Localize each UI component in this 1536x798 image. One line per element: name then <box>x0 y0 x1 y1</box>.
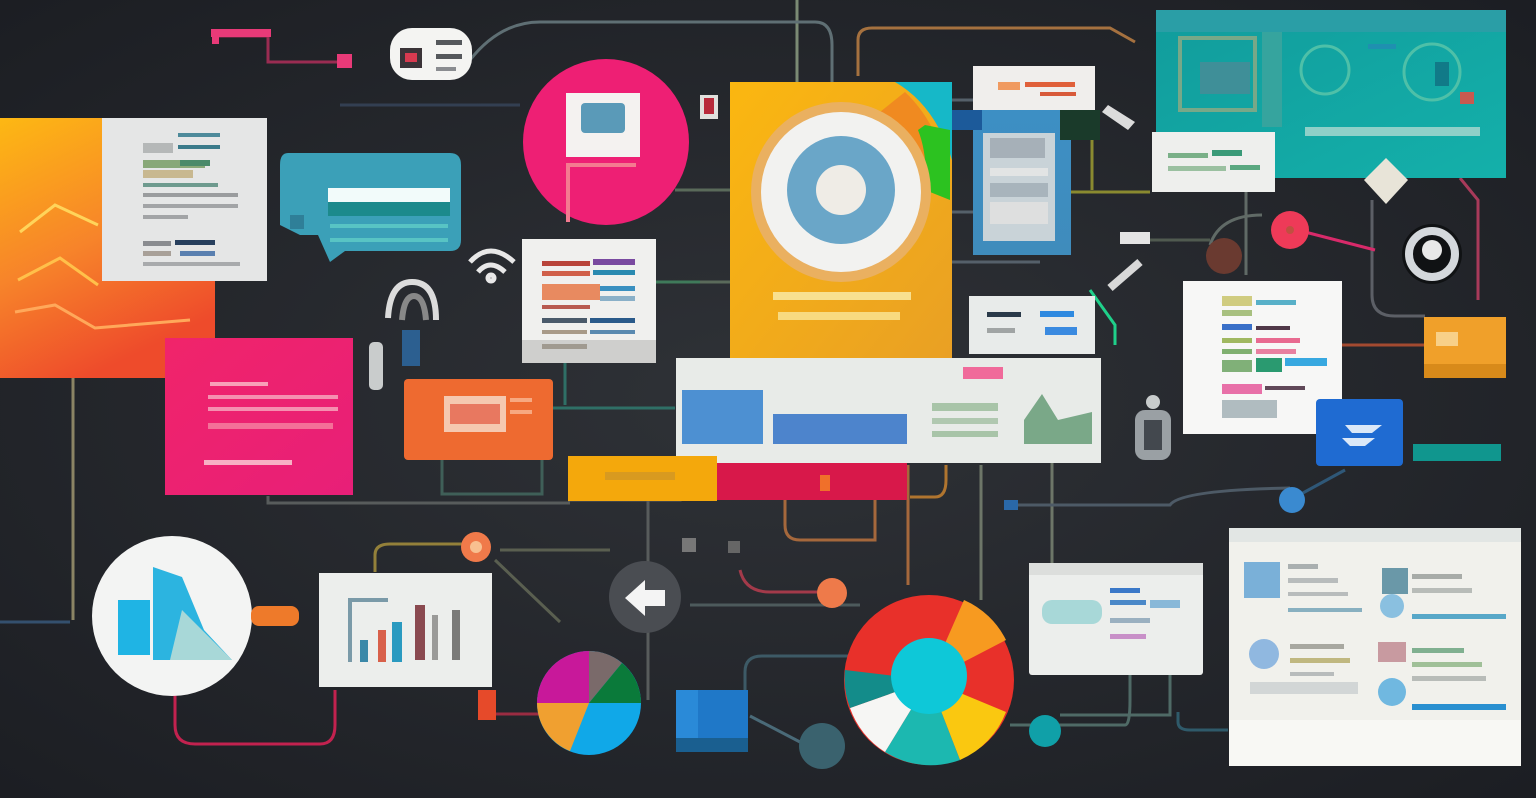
icon: red node <box>1271 211 1309 249</box>
icon: blue hex node <box>1279 487 1305 513</box>
panel: pink callout <box>165 338 353 495</box>
panel: orange button card <box>404 379 553 460</box>
panel: header card red lines <box>973 66 1095 110</box>
panel: white code card <box>1183 281 1342 434</box>
chart: small pie <box>537 651 641 755</box>
icon: red tag <box>478 690 496 720</box>
icon: teal bar <box>1413 444 1501 461</box>
icon: dark circle with arrow <box>609 561 681 633</box>
icon: dark loop <box>1206 238 1242 274</box>
icon: small arrow pointer <box>1102 105 1135 130</box>
panel: bar chart card <box>319 573 492 687</box>
panel: blue phone form <box>952 110 1100 255</box>
panel: teal speech box <box>280 153 461 262</box>
icon: wifi <box>470 251 514 281</box>
panel: wide dashboard card <box>676 358 1101 463</box>
icon: white pill small <box>1135 395 1171 460</box>
icon: ring node <box>1402 224 1462 284</box>
caption text on cover <box>773 292 911 320</box>
icon: grey squares <box>682 538 740 553</box>
panel: pink circle <box>523 59 689 225</box>
panel: teal dashboard top right <box>1156 10 1506 178</box>
panel: orange line chart <box>0 118 215 378</box>
panel: large dashboard bottom right <box>1229 528 1521 766</box>
icon: small tag <box>700 95 718 119</box>
panel: striped table card <box>522 239 656 363</box>
icon: speech bubble top <box>390 28 472 80</box>
icon: orange small node <box>817 578 847 608</box>
icon: arch gauge <box>388 282 436 320</box>
panel: white donut circle <box>92 536 252 696</box>
icon: orange node top <box>461 532 491 562</box>
icon: small blue node <box>1004 500 1018 510</box>
icon: blue badge <box>1316 399 1403 466</box>
panel: grey document card <box>102 118 267 281</box>
icon: teal node bottom <box>1029 715 1061 747</box>
icon: vertical pill <box>369 342 383 390</box>
panel: top-left small link node <box>211 29 352 68</box>
icon: blue plug <box>402 330 420 366</box>
icon: dark teal node <box>799 723 845 769</box>
panel: form card bottom <box>1029 563 1203 675</box>
chart: large donut <box>844 595 1014 765</box>
panel: orange small card <box>1424 317 1506 378</box>
panel: yellow and red banner <box>568 456 907 501</box>
icon: connector plugs <box>1110 232 1150 288</box>
icon: diamond node <box>1364 158 1408 204</box>
panel: white small card under teal <box>1152 132 1275 192</box>
icon: orange plug <box>251 606 299 626</box>
icon: blue book <box>676 690 748 752</box>
panel: small white input card <box>969 296 1095 354</box>
panel: yellow cover with target <box>730 82 952 358</box>
